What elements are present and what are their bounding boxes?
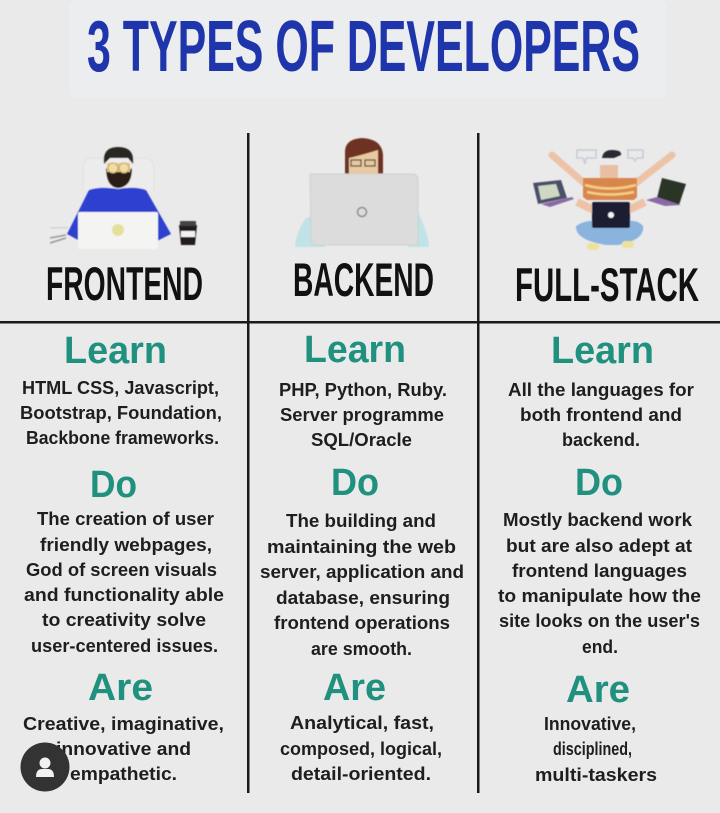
section: backend are: detail-oriented. (291, 764, 431, 784)
section: frontend learn: Bootstrap, Foundation, (20, 403, 222, 423)
section: backend learn: PHP, Python, Ruby. (279, 380, 447, 400)
section: full-stack do: to manipulate how the (498, 586, 701, 606)
section: frontend learn (20, 330, 222, 448)
section: backend do: server, application and (260, 562, 464, 582)
section: backend are: Analytical, fast, (290, 713, 434, 733)
section: frontend are: Creative, imaginative, (23, 714, 224, 734)
section: full-stack do: but are also adept at (506, 536, 692, 556)
section: full-stack do: frontend languages (512, 561, 687, 581)
section: backend do (260, 462, 464, 659)
panel: frontend (20, 147, 224, 784)
icon: profile avatar (20, 742, 70, 792)
section: frontend learn: Backbone frameworks. (26, 428, 219, 448)
title panel (69, 0, 666, 98)
panel: full-stack (498, 150, 701, 785)
section: full-stack learn: both frontend and (520, 405, 682, 425)
section: full-stack are: multi-taskers (535, 765, 657, 785)
panel: backend (260, 138, 464, 784)
section: backend learn: Server programme (280, 405, 444, 425)
section: full-stack are: disciplined, (553, 739, 632, 759)
section: frontend do: Do (90, 464, 137, 506)
section: frontend do: God of screen visuals (26, 560, 217, 580)
section: backend do: frontend operations (274, 613, 450, 633)
section: backend are: composed, logical, (280, 739, 442, 759)
section: full-stack are: Innovative, (544, 714, 636, 734)
heading: backend: BACKEND (293, 253, 434, 306)
section: frontend are: empathetic. (70, 764, 177, 784)
icon: full-stack developer (533, 150, 686, 250)
section: backend learn: SQL/Oracle (311, 430, 412, 450)
section: frontend do: to creativity solve (42, 610, 206, 630)
section: full-stack learn (508, 330, 694, 450)
section: full-stack do: Do (575, 462, 623, 504)
section: frontend are: Are (88, 667, 153, 709)
section: full-stack learn: backend. (562, 430, 640, 450)
section: frontend are: innovative and (56, 739, 191, 759)
section: frontend do: The creation of user (37, 509, 214, 529)
section: full-stack do (498, 462, 701, 657)
section: frontend learn: HTML CSS, Javascript, (22, 378, 219, 398)
section: frontend do: and functionality able (24, 585, 224, 605)
section: full-stack do: Mostly backend work (503, 510, 693, 530)
section: backend are: Are (323, 667, 386, 709)
section: frontend do (24, 464, 224, 656)
section: full-stack do: end. (582, 637, 618, 657)
heading: frontend: FRONTEND (46, 257, 203, 310)
section: full-stack are (535, 669, 657, 785)
section: full-stack learn: Learn (551, 330, 654, 372)
section: frontend learn: Learn (64, 330, 167, 372)
icon: backend developer (295, 138, 429, 247)
section: backend are (280, 667, 442, 784)
section: backend do: The building and (286, 511, 436, 531)
section: backend learn: Learn (304, 329, 406, 371)
section: frontend are (23, 667, 224, 784)
section: backend learn (279, 329, 447, 450)
section: full-stack are: Are (566, 669, 630, 711)
icon: frontend developer (50, 147, 197, 249)
section: backend do: are smooth. (311, 639, 412, 659)
section: frontend do: friendly webpages, (40, 535, 212, 555)
section: frontend do: user-centered issues. (31, 636, 218, 656)
section: full-stack do: site looks on the user's (499, 611, 700, 631)
section: full-stack learn: All the languages for (508, 380, 694, 400)
section: backend do: maintaining the web (267, 537, 456, 557)
section: backend do: Do (331, 462, 379, 504)
section: backend do: database, ensuring (276, 588, 450, 608)
